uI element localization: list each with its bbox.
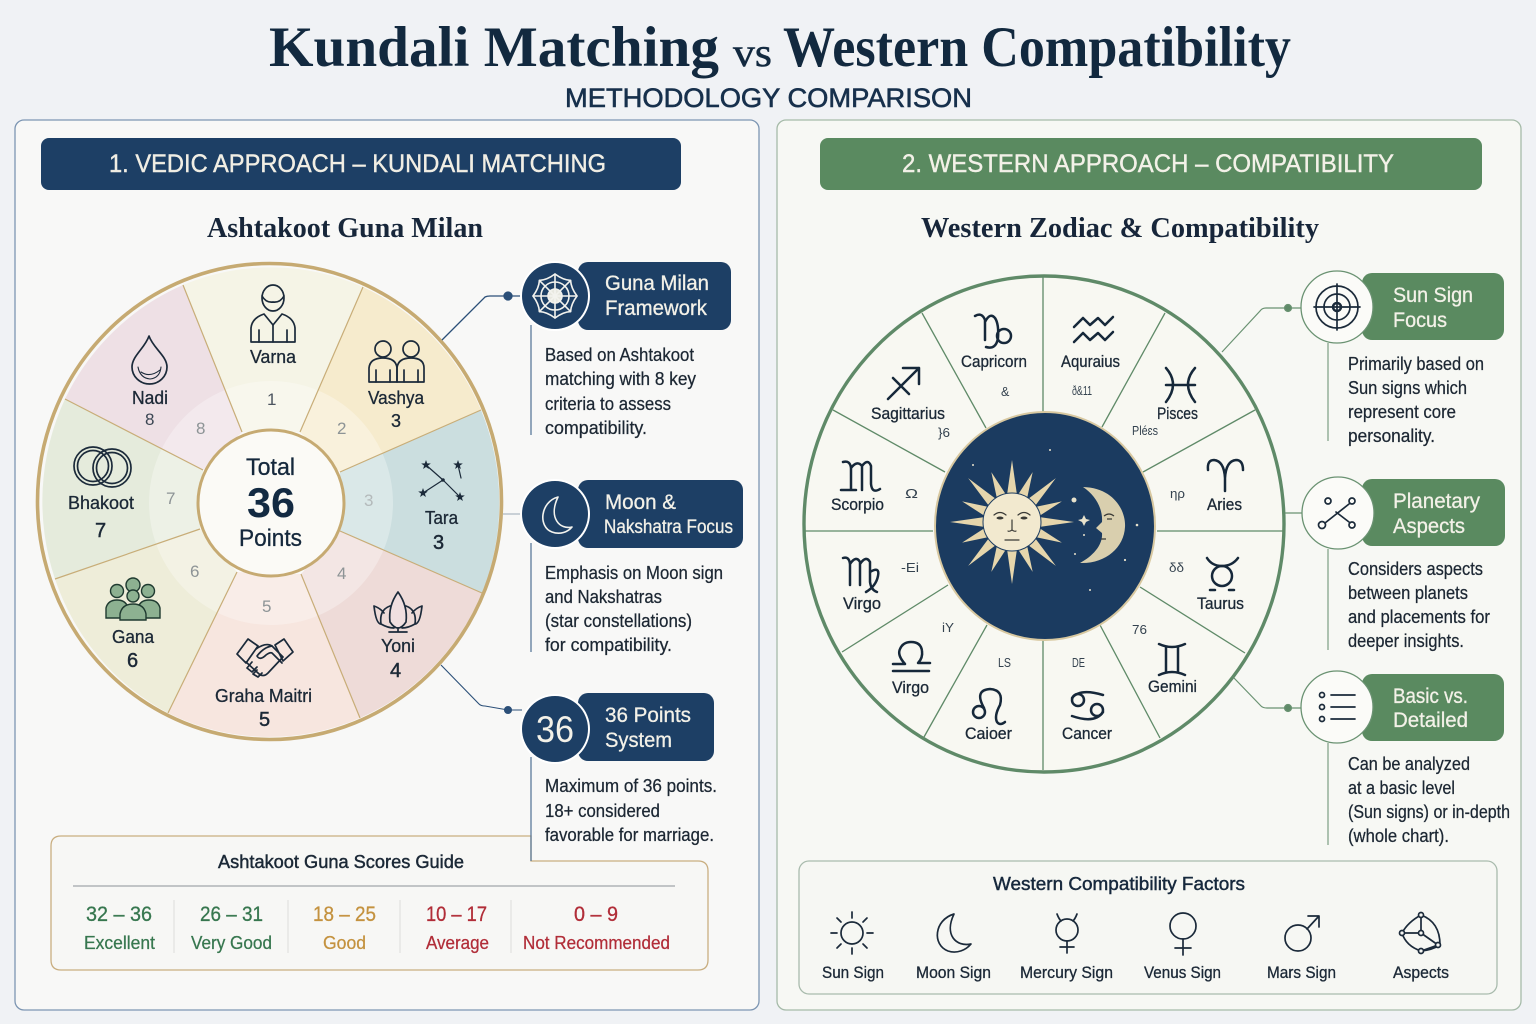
sign: Taurus: Taurus [1197,595,1244,613]
sign: Scorpio: Scorpio [831,496,884,514]
sign: Scorpio: Ω [905,487,918,501]
factor: Mercury Sign: Mercury Sign [1020,964,1113,982]
callout: 36 Points System: 36 Points [605,703,691,727]
panel: western approach [777,120,1521,1010]
text: Sun Sign description: represent core [1348,402,1456,422]
text: Guna Milan description: criteria to assess [545,394,671,414]
callout: Basic vs Detailed: Detailed [1393,708,1468,732]
sign: Libra: iY [942,621,955,635]
sign: Aquarius: ð&11 [1072,384,1092,398]
sign: Sagittarius: Sagittarius [871,405,945,423]
icon: Tara constellation [418,460,465,501]
text: Basic vs Detailed description: Can be analyzed [1348,754,1470,774]
icon: target [1314,284,1360,330]
center: total points: 36 [247,479,295,526]
segment: Bhakoot [42,399,203,579]
label: Varna: Varna [250,347,297,367]
callout: Moon and Nakshatra Focus [520,479,743,655]
text: Sun Sign description: Primarily based on [1348,354,1484,374]
label: Bhakoot [68,489,175,542]
text: Guna Milan description: matching with 8 key [545,369,696,389]
icon: Gana group [106,578,160,620]
factor: Mars Sign [1267,916,1336,982]
text: Planetary description: Considers aspects [1348,559,1483,579]
factor: Sun Sign: Sun Sign [822,964,884,982]
sign: Sagittarius [871,368,950,440]
label: Yoni: 4 [337,564,346,583]
label: Bhakoot: Bhakoot [68,493,134,513]
sign: Leo [965,656,1012,743]
factor: Aspects: Aspects [1393,964,1449,982]
text: 36 points description: 18+ considered [545,801,660,821]
text: Planetary description [1348,559,1490,651]
factor: Moon Sign: Moon Sign [916,964,991,982]
callout: Basic vs Detailed: Basic vs. [1393,684,1468,708]
label: Graha Maitri [215,597,312,731]
text: Moon description: for compatibility. [545,635,672,655]
callout: Guna Milan Framework: Guna Milan [605,271,709,295]
panel: scores guide [51,836,708,970]
label: Bhakoot: 7 [166,489,175,508]
label: Vashya: 2 [337,419,346,438]
label: Vashya [337,388,425,438]
text: Guna Milan description: Based on Ashtakoot [545,345,694,365]
label: Graha Maitri: Graha Maitri [215,686,312,706]
icon: crescent moon [543,497,572,533]
sign: Leo: LS [998,656,1011,670]
sign: Capricorn: Capricorn [961,353,1027,371]
label: Tara [364,491,459,554]
connector: wheel to Sun Sign [1222,304,1301,352]
icon: Graha Maitri handshake [237,639,293,677]
label: Gana [112,562,199,672]
score: Good: Good [323,933,366,953]
score: Good: 18 – 25 [313,903,376,926]
label: Nadi: Nadi [132,388,168,408]
text: Planetary description: deeper insights. [1348,631,1464,651]
label: Nadi: 8 [196,419,205,438]
sign: Virgo: Virgo [843,595,881,613]
sign: Leo: Caioer [965,725,1012,743]
center: total points: Points [239,525,302,552]
sign: Capricorn [961,315,1027,399]
icon: Nadi drop [132,336,167,384]
text: Basic vs Detailed description: at a basic level [1348,778,1455,798]
icon: Vashya people [369,341,424,382]
label: Nadi: 8 [145,410,154,429]
text: 36 points description: Maximum of 36 points. [545,776,717,796]
title [269,16,1291,79]
text: Sun Sign description [1348,354,1484,446]
label: Tara: 3 [433,532,444,554]
connector: wheel to Planetary [1285,512,1302,514]
text: Moon description: and Nakshatras [545,587,662,607]
title: Western Compatibility [783,16,1291,79]
score: Very Good: Very Good [191,933,272,953]
score: Average [426,903,489,953]
text: Guna Milan description: compatibility. [545,418,647,438]
chart: guna wheel [38,264,502,740]
sign: Libra: Virgo [892,679,929,697]
segment: Yoni [301,531,482,718]
sign: Aries: ηρ [1170,487,1185,501]
score: Excellent: Excellent [84,933,155,953]
text: Basic vs Detailed description: (whole chart). [1348,826,1449,846]
sign: Taurus [1169,558,1244,613]
score: Excellent: 32 – 36 [86,903,152,926]
icon: Bhakoot rings [74,447,131,487]
text: Sun Sign description: Sun signs which [1348,378,1467,398]
callout: 36 Points System [520,693,717,861]
score: Not Recommended: Not Recommended [523,933,670,953]
factor: Mercury Sign [1020,914,1113,982]
callout: Sun Sign Focus: Sun Sign [1393,283,1473,307]
connector: wheel to Basic vs Detailed [1234,678,1301,712]
connector: wheel to Guna Milan [442,292,522,340]
factor: Mars Sign: Mars Sign [1267,964,1336,982]
callout: 36 Points System: System [605,728,672,752]
label: Gana: Gana [112,627,155,647]
connector: wheel to Moon [503,513,522,515]
segment: Varna [183,267,363,432]
text: Planetary description: and placements for [1348,607,1490,627]
heading: Ashtakoot Guna Milan: Ashtakoot Guna Milan [207,213,483,244]
center: total points: Total [246,454,295,481]
score: Good [313,903,376,953]
callout: Sun Sign Focus: Focus [1393,308,1447,332]
center: total points [198,430,344,576]
sign: Cancer: DE [1072,656,1085,670]
factor: Moon Sign [916,914,991,982]
label: Gana: 6 [190,562,199,581]
chart: zodiac wheel [804,276,1284,772]
segment: Nadi [65,285,242,470]
text: Moon description: Emphasis on Moon sign [545,563,723,583]
panel: compatibility factors: Western Compatibility Factors [993,873,1245,894]
text: 36 points description [545,776,717,845]
factor: Aspects [1393,912,1449,982]
label: Yoni: Yoni [381,636,415,656]
label: Tara: 3 [364,491,373,510]
label: Nadi [132,388,205,438]
segment: Graha Maitri [168,572,360,737]
sign: Capricorn: & [1001,385,1010,399]
score: Average: Average [426,933,489,953]
medallion: sun and moon [935,412,1155,640]
text: Moon description [545,563,723,655]
sign: Cancer [1062,656,1112,743]
panel: scores guide: Ashtakoot Guna Scores Guide [218,851,464,872]
callout: Moon and Nakshatra Focus: Nakshatra Focus [604,516,733,538]
title: Kundali Matching [269,16,719,79]
icon: checklist [1320,692,1355,722]
heading bar: vedic approach [41,138,681,190]
subtitle: METHODOLOGY COMPARISON [565,83,972,113]
sign: Scorpio [831,462,918,514]
sign: Pisces: Pisces [1157,405,1198,423]
callout: Planetary Aspects: Aspects [1393,514,1465,538]
callout: Sun Sign Focus [1301,271,1504,446]
icon: moon [1080,487,1125,563]
text: 36 points description: favorable for marriage. [545,825,714,845]
label: Vashya: Vashya [368,388,425,408]
sign: Virgo [843,558,919,613]
callout: Guna Milan Framework: Framework [605,296,707,320]
label: Vashya: 3 [391,411,401,431]
score: Excellent [84,903,155,953]
sign: Gemini: Gemini [1148,678,1197,696]
factor: Venus Sign [1144,913,1221,982]
connector: wheel to 36 points [441,665,522,714]
heading bar: vedic approach: 1. VEDIC APPROACH – KUNDALI MATCHING [109,150,606,178]
label: Bhakoot: 7 [95,520,106,542]
text: Sun Sign description: personality. [1348,426,1435,446]
callout: Moon and Nakshatra Focus: Moon & [605,490,676,514]
label: Yoni [337,564,415,682]
sign: Gemini [1132,623,1197,696]
text: Planetary description: between planets [1348,583,1468,603]
title: vs [733,30,772,75]
sign: Pisces [1132,368,1198,438]
score: Average: 10 – 17 [426,903,487,926]
factor: Sun Sign [822,912,884,982]
callout: Planetary Aspects: Planetary [1393,489,1480,513]
label: Varna [250,347,297,409]
sign: Aries: Aries [1207,496,1242,514]
heading bar: western approach [820,138,1482,190]
sign: Taurus: δδ [1169,561,1184,575]
label: Varna: 1 [267,390,276,409]
score: Not Recommended [523,903,670,953]
callout: 36 Points System: 36 [536,709,574,750]
segment: Tara [340,410,499,593]
icon: aspects nodes [1318,498,1355,528]
sign: Aquarius: Aquraius [1061,353,1120,371]
factor: Venus Sign: Venus Sign [1144,964,1221,982]
callout: Planetary Aspects [1302,477,1505,651]
sign: Libra [892,621,955,697]
icon: Yoni lotus [374,592,422,632]
score: Not Recommended: 0 – 9 [574,903,618,926]
segment: Vashya [300,287,481,472]
label: Graha Maitri: 5 [262,597,271,616]
panel: vedic approach [15,120,759,1010]
icon: Varna person [251,285,295,342]
sign: Pisces: Pléɛs [1132,424,1158,438]
segment: Gana [55,529,237,713]
sign: Sagittarius: }6 [938,426,950,440]
text: Moon description: (star constellations) [545,611,692,631]
icon: web [533,274,577,318]
sign: Cancer: Cancer [1062,725,1112,743]
score: Very Good [191,903,272,953]
heading: Western Zodiac and Compatibility: Western Zodiac & Compatibility [921,213,1319,244]
sign: Aquarius [1061,317,1120,398]
sign: Virgo: -Ei [901,561,919,575]
panel: compatibility factors [799,861,1497,994]
icon: sun [950,460,1074,584]
label: Graha Maitri: 5 [259,709,270,731]
sign: Gemini: 76 [1132,623,1147,637]
text: Basic vs Detailed description: (Sun signs) or in-depth [1348,802,1510,822]
text: Basic vs Detailed description [1348,754,1510,846]
label: Gana: 6 [127,650,138,672]
heading bar: western approach: 2. WESTERN APPROACH – COMPATIBILITY [902,150,1394,178]
callout: Guna Milan Framework [520,261,731,438]
sign: Aries [1170,460,1243,514]
callout: Basic vs Detailed [1301,671,1510,846]
label: Tara: Tara [425,508,459,528]
text: Guna Milan description [545,345,696,438]
score: Very Good: 26 – 31 [200,903,263,926]
label: Yoni: 4 [390,660,401,682]
